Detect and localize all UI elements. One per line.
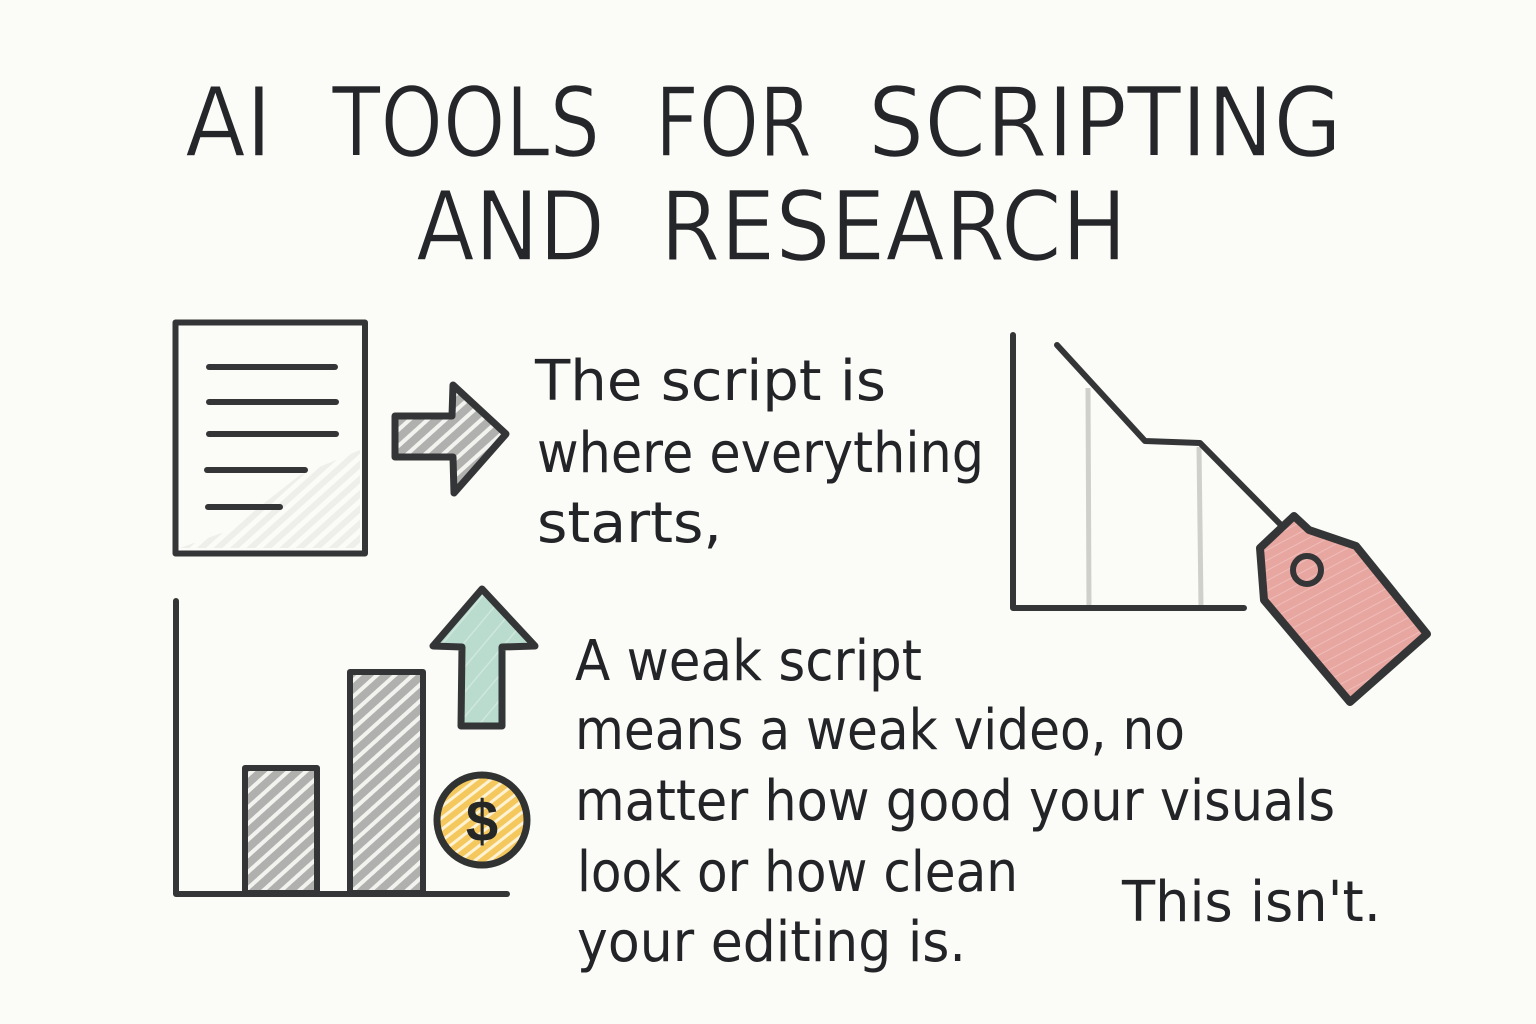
text: script starts: where everything: [537, 421, 984, 486]
title: RESEARCH: [660, 171, 1127, 283]
chart: rising bars: [176, 601, 507, 894]
tag hole: [1293, 556, 1321, 584]
falling line: [1057, 345, 1283, 527]
title: AND: [416, 171, 605, 283]
title: FOR: [655, 67, 812, 179]
tall bar: [350, 672, 423, 893]
chart: falling price line: [1013, 335, 1283, 608]
icon: red price tag: [1260, 516, 1427, 702]
text: script starts: starts,: [537, 491, 722, 556]
text: weak script: matter how good your visuals: [575, 769, 1335, 834]
text: weak script: your editing is.: [577, 910, 966, 975]
short bar: [245, 768, 317, 893]
title: AI: [185, 67, 272, 179]
icon: dollar coin: $: [466, 789, 498, 854]
chart axes: [1013, 335, 1244, 608]
icon: script document: [176, 322, 365, 554]
text: weak script: A weak script: [575, 629, 922, 694]
text: weak script: [575, 629, 1335, 975]
text: this isn't: This isn't.: [1121, 870, 1381, 935]
title: TOOLS: [331, 67, 600, 179]
arrow: script to text: [395, 385, 506, 493]
grey drop lines: [1088, 388, 1201, 606]
document text lines: [207, 367, 336, 507]
text: weak script: means a weak video, no: [575, 698, 1185, 763]
arrow: green up: [433, 589, 535, 726]
bar chart axes: [176, 601, 507, 894]
text: script starts: [534, 349, 984, 556]
title: [185, 67, 1342, 283]
text: weak script: look or how clean: [577, 840, 1018, 905]
title: SCRIPTING: [868, 67, 1342, 179]
text: script starts: The script is: [534, 349, 886, 414]
icon: dollar coin: [437, 775, 527, 865]
